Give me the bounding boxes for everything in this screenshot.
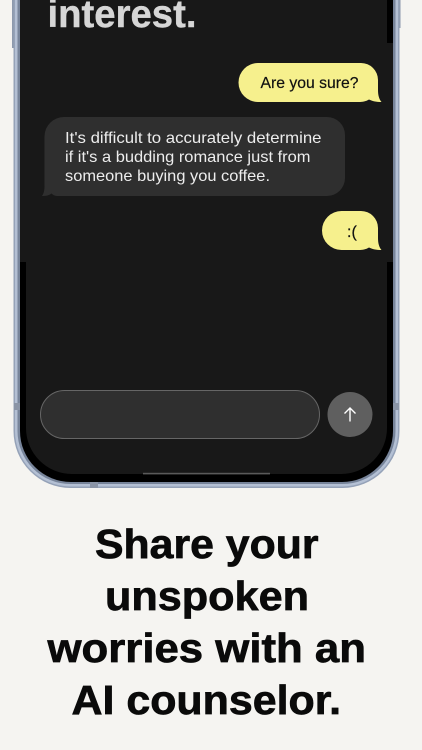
send button xyxy=(328,392,372,437)
counselor reply bubble: It's difficult to accurately determine xyxy=(65,130,322,147)
icon: up arrow xyxy=(344,408,356,422)
screen xyxy=(20,0,393,474)
user bubble: sad face xyxy=(322,211,382,250)
headline: worries with an xyxy=(46,625,366,671)
user bubble: sad face: :( xyxy=(347,224,357,241)
headline: unspoken xyxy=(105,573,309,619)
counselor reply bubble: someone buying you coffee. xyxy=(65,168,270,185)
headline: AI counselor. xyxy=(72,677,341,723)
counselor reply bubble xyxy=(42,117,345,196)
phone frame xyxy=(12,0,400,488)
user bubble: are you sure: Are you sure? xyxy=(260,75,359,92)
home indicator xyxy=(143,473,270,474)
black bezel xyxy=(20,0,393,482)
counselor reply bubble: if it's a budding romance just from xyxy=(65,149,310,166)
phone xyxy=(12,0,400,488)
headline: Share your xyxy=(95,521,319,567)
message input field xyxy=(40,390,320,438)
user bubble: are you sure xyxy=(238,63,382,102)
headline xyxy=(46,521,366,723)
